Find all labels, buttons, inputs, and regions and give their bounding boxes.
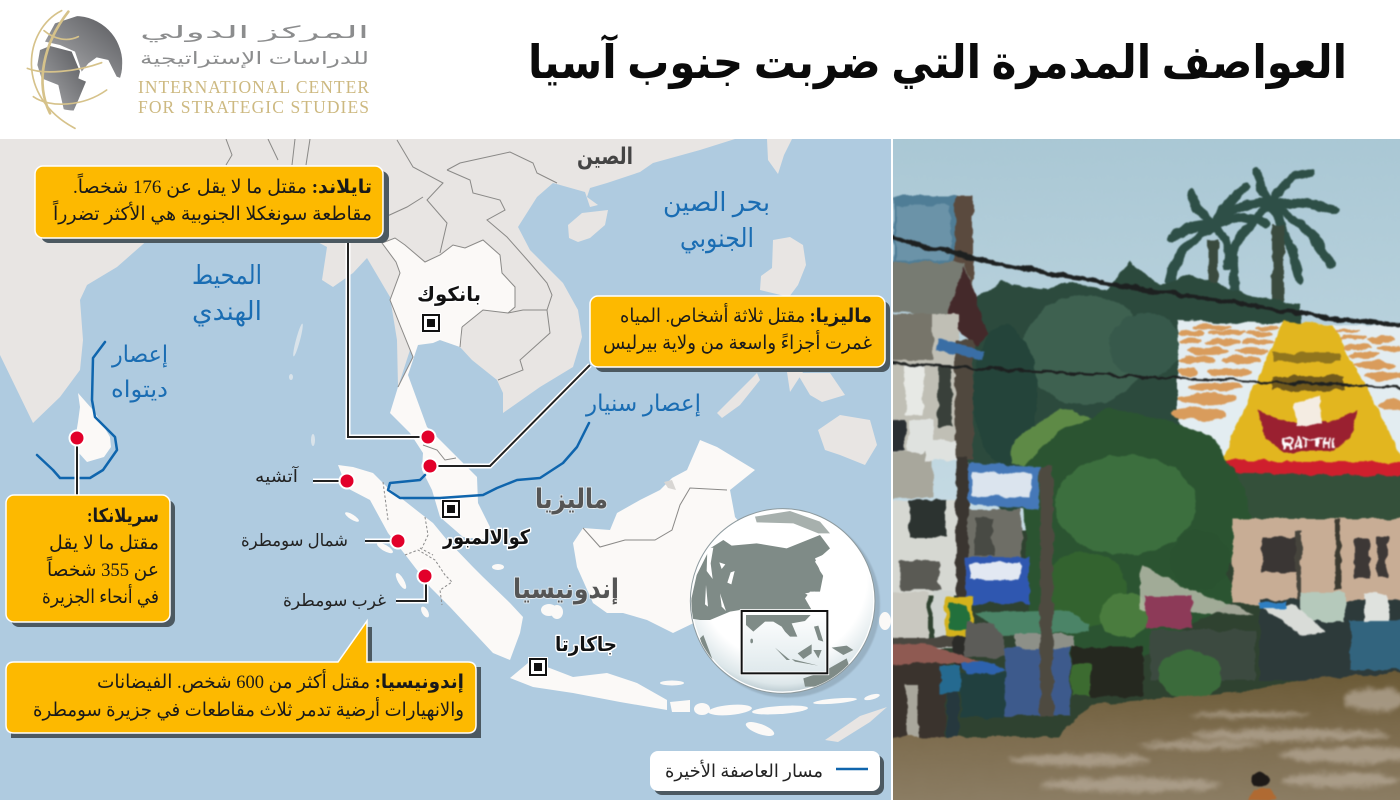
right-hand shops [1140, 565, 1400, 699]
callout: Sri Lanka: سريلانكا: [87, 506, 159, 527]
storm track: Ditwah [37, 342, 117, 478]
sea labels: بحر الصين [663, 188, 770, 218]
callout: Malaysia: غمرت أجزاءً واسعة من ولاية بيرليس [603, 330, 872, 354]
capital markers [421, 313, 548, 677]
power cables [885, 235, 1400, 388]
sea labels: الجنوبي [680, 224, 754, 254]
Java [510, 663, 667, 710]
pale right-hand building [1232, 519, 1400, 680]
inset frame [742, 611, 827, 673]
Sri Lanka [75, 393, 111, 462]
callout: Malaysia [590, 296, 890, 372]
sea labels: الهندي [192, 297, 262, 327]
flood water [880, 672, 1400, 800]
callout: Indonesia: والانهيارات أرضية تدمر ثلاث مقاطعات في جزيرة سومطرة [33, 697, 464, 721]
title: العواصف المدمرة التي ضربت جنوب آسيا [528, 34, 1347, 89]
callout: Thailand [35, 166, 389, 243]
callout: Sri Lanka: عن 355 شخصاً [47, 556, 159, 581]
callout: Thailand: مقاطعة سونغكلا الجنوبية هي الأكثر تضرراً [53, 200, 372, 225]
palm trees [1170, 172, 1336, 310]
city labels: جاكارتا [555, 634, 617, 656]
city labels: كوالالمبور [442, 527, 530, 549]
province labels: آتشيه [255, 465, 299, 486]
tree line behind billboard [960, 262, 1300, 510]
logo Arabic name: المركز الدولي [140, 23, 369, 43]
locator globe [690, 509, 880, 698]
city labels: بانكوك [417, 284, 481, 306]
storm labels [111, 342, 701, 417]
country labels: إندونيسيا [513, 574, 619, 605]
storm labels: إعصار [111, 342, 168, 368]
big street tree [1020, 408, 1255, 660]
lower left building and storefronts [885, 440, 1143, 737]
left building [885, 262, 988, 460]
political borders [226, 139, 727, 605]
storm track: Senyar [388, 423, 589, 498]
photo base tones [926, 529, 1300, 739]
logo English name [138, 77, 369, 117]
logo Arabic name: للدراسات الإستراتيجية [140, 49, 369, 68]
Borneo [573, 440, 770, 633]
callout: Indonesia: إندونيسيا: مقتل أكثر من 600 شخص. الفيضانات [97, 669, 464, 693]
sea labels: المحيط [192, 261, 262, 290]
location markers [70, 430, 438, 584]
country labels [513, 144, 633, 605]
logo globe [27, 11, 123, 128]
callout: Sri Lanka [6, 495, 175, 627]
sea labels [192, 188, 770, 327]
Lesser Sunda and small islands [289, 323, 891, 739]
callout: Thailand: تايلاند: مقتل ما لا يقل عن 176 شخصاً. [73, 173, 372, 198]
mainland Asia [0, 139, 735, 423]
person wading [1248, 772, 1276, 800]
distant rooftop billboard [893, 194, 976, 289]
map panel [0, 139, 891, 800]
callout: Indonesia [6, 621, 481, 738]
callout: Sri Lanka: مقتل ما لا يقل [49, 533, 159, 554]
storm labels: إعصار سنيار [585, 391, 701, 417]
province labels: شمال سومطرة [241, 531, 348, 550]
city labels [417, 284, 617, 656]
storm labels: ديتواه [111, 377, 168, 403]
callout: Malaysia: ماليزيا: مقتل ثلاثة أشخاص. المياه [620, 303, 872, 327]
country labels: ماليزيا [535, 484, 608, 515]
photo: flooded street in Sri Lanka [880, 130, 1400, 800]
advertising billboard: RATTHI [1282, 435, 1336, 452]
logo: International Center for Strategic Studies [27, 11, 369, 128]
legend [650, 751, 884, 795]
logo English name: INTERNATIONAL CENTER [138, 77, 369, 97]
logo Arabic name [140, 23, 369, 68]
advertising billboard [1171, 321, 1400, 476]
right background greenery [1235, 472, 1400, 522]
legend: مسار العاصفة الأخيرة [665, 760, 823, 782]
sky [880, 130, 1400, 530]
province labels [241, 465, 386, 610]
Sumatra [338, 465, 523, 660]
country labels: الصين [577, 144, 633, 170]
callout: Sri Lanka: في أنحاء الجزيرة [42, 584, 159, 608]
connector lines [77, 238, 590, 601]
province labels: غرب سومطرة [283, 591, 386, 610]
Thailand and Malay peninsula [382, 238, 515, 540]
logo English name: FOR STRATEGIC STUDIES [138, 97, 369, 117]
Hainan, Taiwan, Philippines and Timor [568, 139, 887, 742]
header band [26, 10, 1344, 130]
